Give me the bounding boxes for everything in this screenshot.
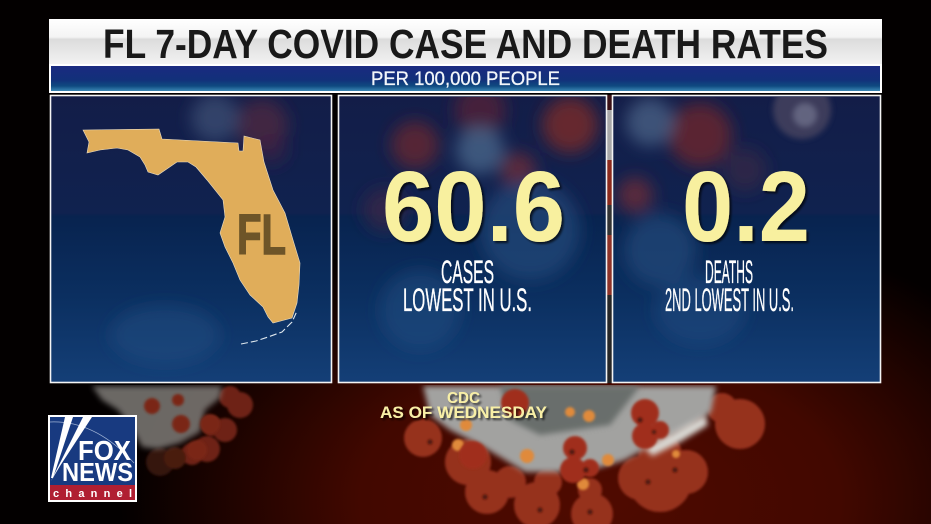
- large virus at centre: [404, 386, 765, 524]
- icon: Fox News Channel logo: FOX: [78, 435, 131, 466]
- bottom virus illustration: [92, 386, 765, 524]
- subtitle: PER 100,000 PEOPLE: [371, 69, 560, 90]
- label: LOWEST IN U.S.: [403, 282, 532, 318]
- small virus at left: [92, 386, 253, 476]
- map of Florida: [83, 129, 300, 344]
- title: FL 7-DAY COVID CASE AND DEATH RATES: [103, 21, 828, 67]
- value: 0.2: [682, 151, 810, 263]
- gap strip between panels: [607, 95, 612, 383]
- faint virus: [110, 94, 288, 365]
- Florida Keys: [241, 311, 297, 344]
- panel: deaths: [612, 81, 880, 382]
- icon: Fox News Channel logo: channel: [53, 488, 132, 500]
- label: DEATHS: [705, 254, 753, 290]
- title banner: [49, 19, 882, 93]
- source note: [380, 390, 548, 422]
- label: [403, 254, 532, 318]
- icon: Fox News Channel logo: NEWS: [62, 457, 133, 487]
- panel: Florida map: [50, 94, 332, 382]
- small virus top right: [771, 97, 833, 142]
- source note: AS OF WEDNESDAY: [380, 403, 548, 422]
- faint virus: [363, 84, 598, 350]
- faint virus: [617, 98, 767, 345]
- subtitle bar: [51, 66, 880, 91]
- source note: CDC: [447, 390, 480, 407]
- panel: cases: [338, 84, 606, 382]
- label: [665, 254, 794, 318]
- FL label: FL: [237, 203, 286, 267]
- label: CASES: [441, 254, 494, 290]
- value: 60.6: [382, 151, 565, 263]
- icon: Fox News Channel logo: [48, 415, 137, 502]
